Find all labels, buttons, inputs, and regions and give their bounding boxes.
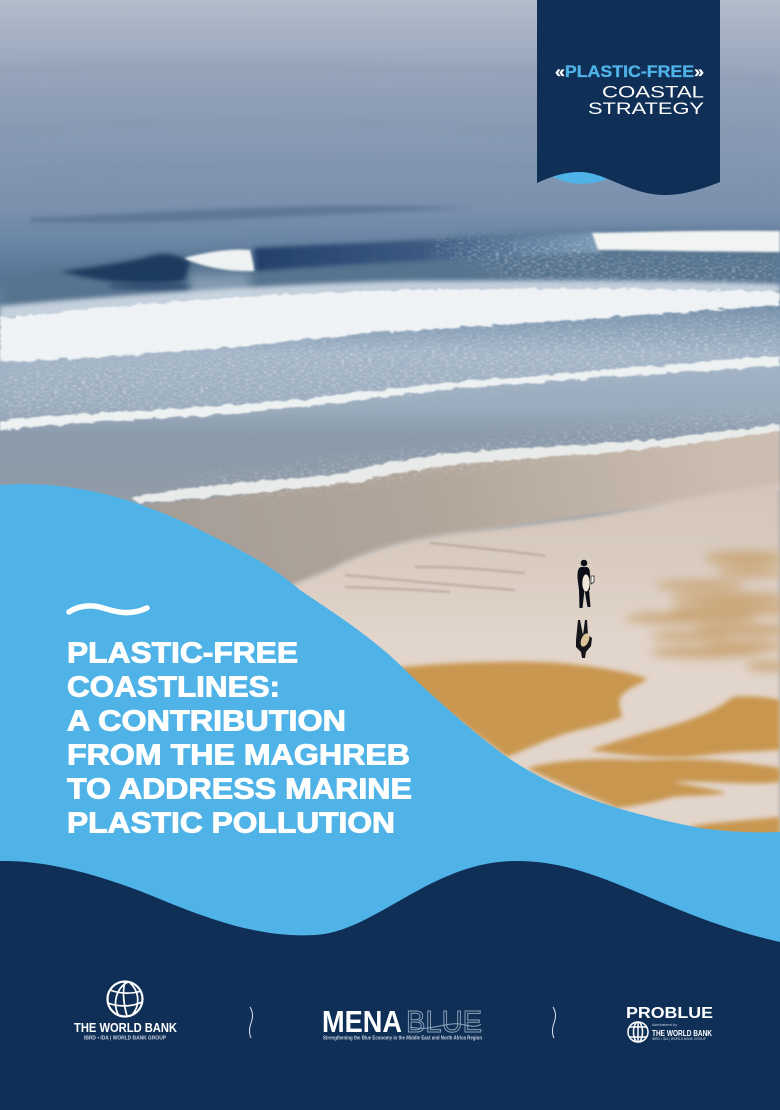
title: PLASTIC-FREE xyxy=(67,638,298,670)
title ornament: white wave stroke xyxy=(69,606,147,613)
logo: PROBLUE: IBRD • IDA | WORLD BANK GROUP xyxy=(652,1037,707,1041)
logo: PROBLUE: PROBLUE xyxy=(626,1005,713,1022)
title: A CONTRIBUTION xyxy=(67,706,346,738)
ripple patches of darker sand xyxy=(625,551,780,671)
title: TO ADDRESS MARINE xyxy=(67,774,412,806)
banner label: «PLASTIC-FREE » xyxy=(555,63,704,81)
sand ripple marks xyxy=(345,543,545,592)
title: COASTLINES: xyxy=(67,672,280,704)
dry sand xyxy=(280,483,780,860)
logo: The World Bank: IBRD • IDA | WORLD BANK GROUP xyxy=(84,1036,166,1042)
logo: PROBLUE: THE WORLD BANK xyxy=(652,1028,713,1038)
logo: MENA Blue: Strengthening the Blue Economy in the Middle East and North Africa Region xyxy=(323,1036,482,1042)
title xyxy=(67,638,412,840)
logo: MENA Blue: BLUE xyxy=(406,1004,482,1039)
logo: PROBLUE xyxy=(626,1005,713,1042)
logo: PROBLUE: Administered by xyxy=(652,1022,677,1027)
beach and sea photograph xyxy=(0,0,780,860)
banner subtitle: COASTAL xyxy=(602,82,704,102)
logo: The World Bank: THE WORLD BANK xyxy=(74,1021,177,1035)
icon: small globe xyxy=(628,1022,648,1042)
logo: MENA Blue xyxy=(322,1004,482,1042)
banner: plastic-free coastal strategy xyxy=(537,0,720,195)
title: FROM THE MAGHREB xyxy=(67,740,410,772)
logo: MENA Blue: MENA xyxy=(322,1004,402,1039)
orange wet sand patches xyxy=(395,662,648,757)
foam bands xyxy=(0,280,780,320)
banner subtitle xyxy=(588,82,704,118)
banner subtitle: STRATEGY xyxy=(588,99,704,118)
logo: The World Bank xyxy=(74,982,177,1042)
divider squiggle xyxy=(552,1007,555,1038)
icon: globe xyxy=(108,982,142,1016)
light blue wave panel xyxy=(0,484,780,945)
dark blue footer wave xyxy=(0,861,780,1110)
surfer and reflection xyxy=(576,560,594,658)
title: PLASTIC POLLUTION xyxy=(67,808,395,840)
breaking wave xyxy=(0,230,780,312)
divider squiggle xyxy=(250,1007,252,1038)
shallow wet sand xyxy=(140,428,780,590)
